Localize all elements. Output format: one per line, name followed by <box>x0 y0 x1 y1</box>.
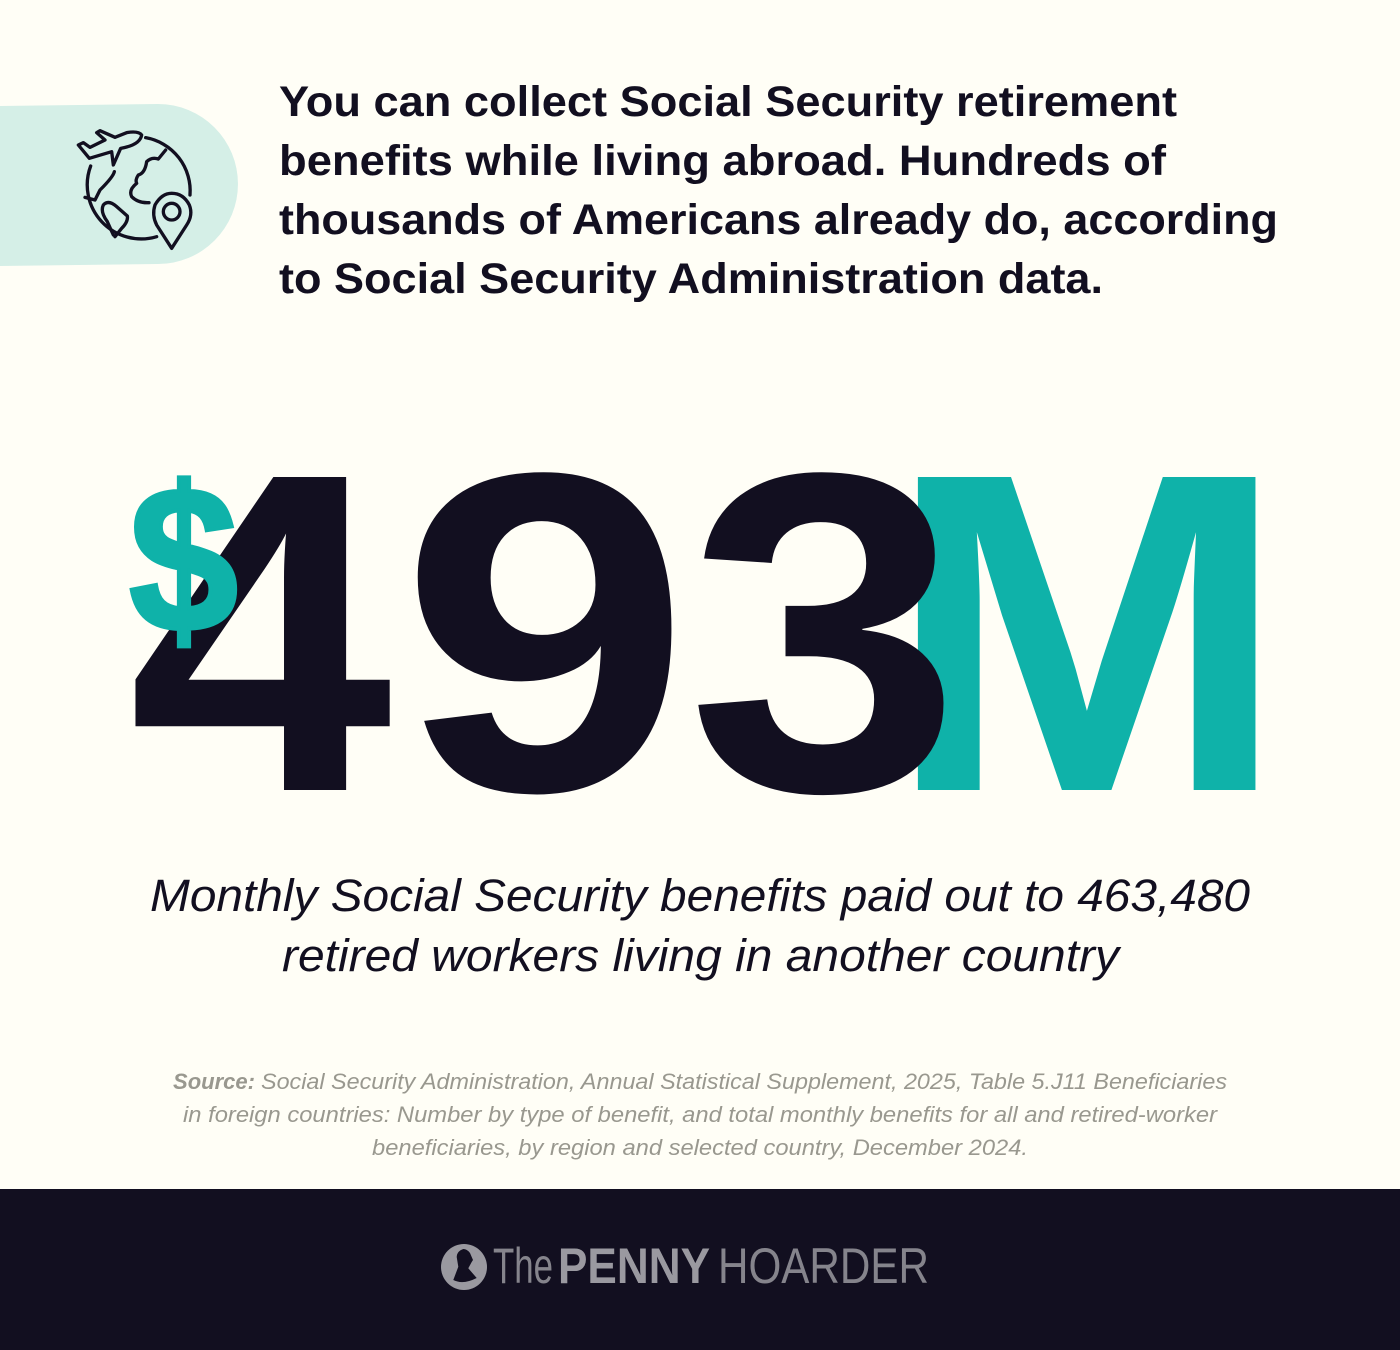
logo: The Penny Hoarder <box>441 1238 929 1294</box>
footer band <box>0 1189 1400 1350</box>
big number: $493M <box>128 378 1288 887</box>
subtitle: retired workers living in another country <box>282 930 1122 981</box>
source note: Source: <box>173 1069 255 1094</box>
logo wordmark: PENNY <box>558 1238 710 1294</box>
heading <box>279 78 1278 303</box>
heading: thousands of Americans already do, according <box>279 196 1278 244</box>
heading: You can collect Social Security retirement <box>279 78 1177 126</box>
digit 4: 4 <box>128 378 395 887</box>
subtitle: Monthly Social Security benefits paid out to 463,480 <box>150 870 1250 921</box>
logo wordmark: The <box>493 1238 553 1294</box>
icon panel: mint pill <box>0 104 238 266</box>
letter M: M <box>886 379 1288 887</box>
source note: Social Security Administration, Annual Statistical Supplement, 2025, Table 5.J11 Beneficiaries <box>261 1069 1227 1094</box>
source note: in foreign countries: Number by type of benefit, and total monthly benefits for all and retired-worker <box>183 1102 1219 1127</box>
icon: globe with plane and location pin <box>78 131 191 248</box>
source note <box>173 1069 1227 1160</box>
dollar sign: $ <box>129 444 238 675</box>
subtitle <box>150 870 1250 981</box>
source note: beneficiaries, by region and selected country, December 2024. <box>372 1135 1028 1160</box>
heading: benefits while living abroad. Hundreds of <box>279 137 1167 185</box>
digit 9: 9 <box>400 378 691 886</box>
logo wordmark: HOARDER <box>718 1238 929 1294</box>
digit 3: 3 <box>687 378 961 887</box>
logo icon: silhouette coin <box>441 1244 487 1290</box>
logo wordmark <box>493 1238 929 1294</box>
heading: to Social Security Administration data. <box>279 255 1103 303</box>
